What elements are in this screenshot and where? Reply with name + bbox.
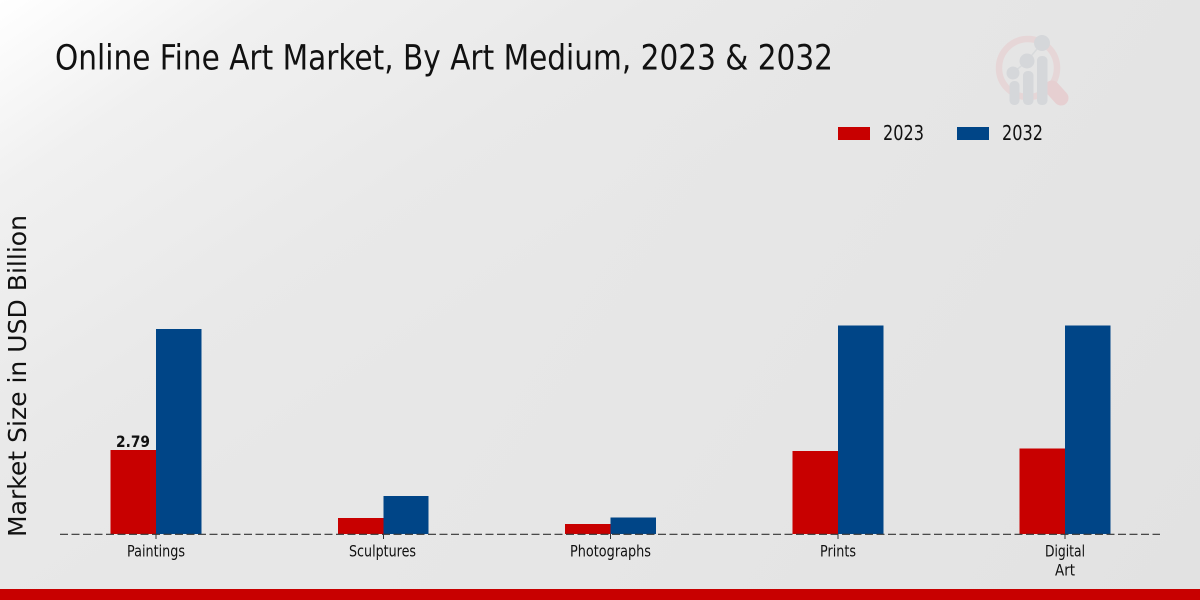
category labels — [127, 542, 1085, 580]
group: Paintings — [110, 329, 202, 534]
title: Online Fine Art Market, By Art Medium, 2023 & 2032 — [55, 38, 833, 78]
y axis title: Market Size in USD Billion — [3, 215, 32, 537]
label: Paintings: Paintings — [127, 542, 185, 560]
label: Prints: Prints — [820, 542, 856, 560]
baseline — [60, 533, 1160, 535]
label: Digital Art — [1045, 542, 1085, 580]
legend — [838, 121, 1043, 145]
group: Sculptures — [338, 496, 428, 534]
data label 2.79: 2.79 — [116, 432, 150, 451]
group: Digital Art — [1020, 326, 1110, 534]
group: Prints — [792, 326, 884, 534]
label: Digital Art: Digital — [1045, 542, 1085, 560]
group: Photographs — [565, 518, 656, 534]
legend swatch 2023 — [838, 127, 870, 140]
legend label 2023: 2023 — [883, 121, 924, 145]
footer bar — [0, 589, 1200, 600]
label: Photographs: Photographs — [570, 542, 651, 560]
legend swatch 2032 — [957, 127, 989, 140]
label: Sculptures: Sculptures — [349, 542, 416, 560]
bar chart — [60, 326, 1160, 539]
label: Digital Art: Art — [1055, 560, 1075, 580]
legend label 2032: 2032 — [1002, 121, 1043, 145]
icon: magnifier logo — [999, 35, 1061, 105]
